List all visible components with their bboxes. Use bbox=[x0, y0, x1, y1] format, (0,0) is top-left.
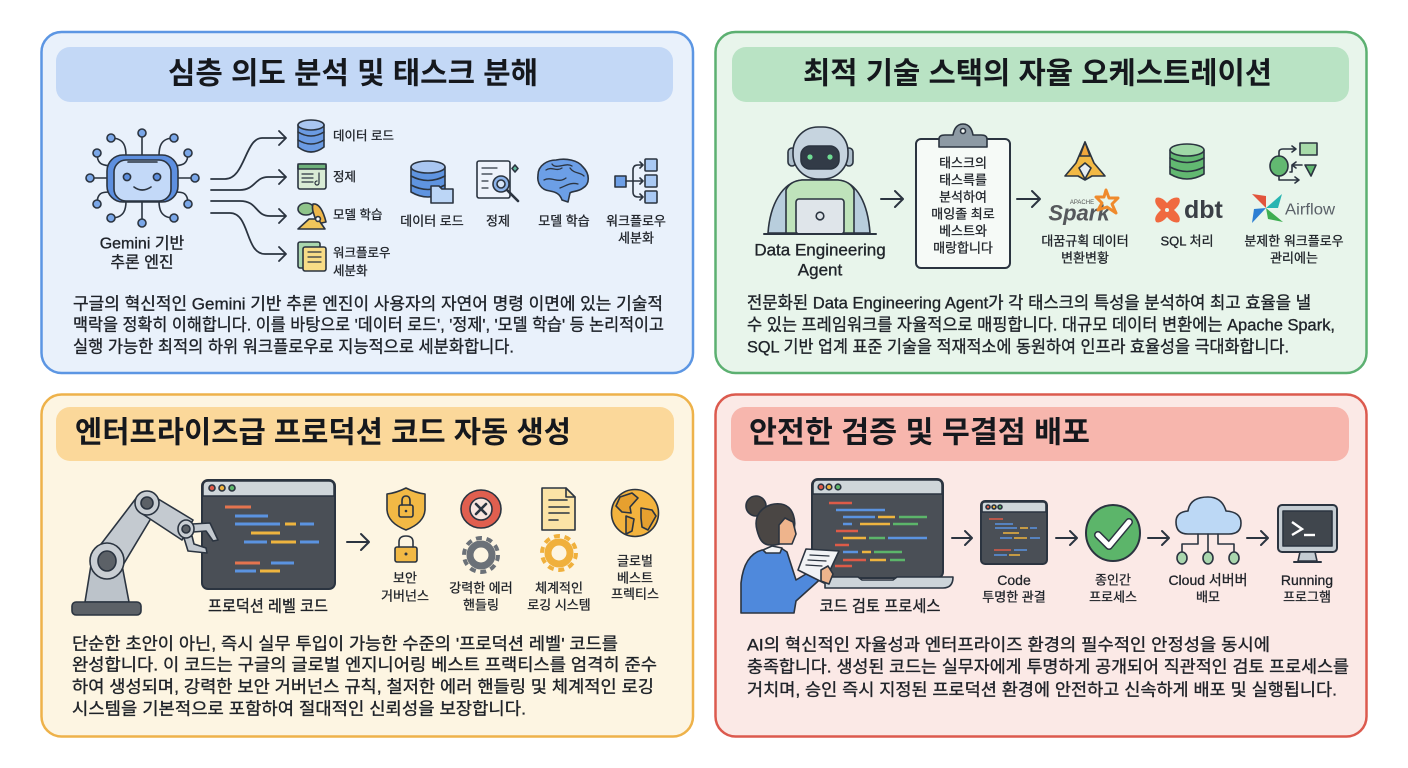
text block: intent analysis body: 구글의 혁신적인 Gemini 기반 추론 엔진이 사용자의 자연어 명령 이면에 있는 기술적 bbox=[73, 294, 663, 314]
label: Gemini engine: Gemini 기반 bbox=[100, 234, 185, 252]
label: cloud server deploy bbox=[1168, 572, 1248, 604]
icon: log document and gear bbox=[542, 488, 576, 570]
arrow: clipboard to tools bbox=[1017, 191, 1040, 207]
icon: clipboard with text: 태스크의 bbox=[939, 156, 987, 170]
text block: production code body bbox=[72, 634, 657, 718]
icon: clipboard with text: 태스륵를 bbox=[939, 172, 987, 188]
label: global best practices bbox=[611, 554, 659, 602]
icon: workflow document bbox=[298, 242, 326, 271]
label: error handling: 강력한 에러 bbox=[449, 580, 513, 596]
icon: database with folder bbox=[411, 161, 453, 203]
logo: Apache Spark: Spark bbox=[1048, 200, 1111, 226]
logo: dbt bbox=[1155, 196, 1224, 224]
icon: clipboard with text: 베스트와 bbox=[939, 224, 987, 238]
label: workflow small bbox=[333, 246, 391, 278]
text block: production code body: 완성합니다. 이 코드는 구글의 글로벌 엔지니어링 베스트 프랙티스를 엄격히 준수 bbox=[72, 656, 657, 674]
label: workflow small: 세분화 bbox=[333, 264, 368, 278]
text block: production code body: 시스템을 기본적으로 포함하여 절대적인 신뢰성을 보장합니다. bbox=[72, 700, 526, 718]
arrow: agent to clipboard bbox=[881, 191, 903, 207]
label: running program: 프로그햄 bbox=[1283, 590, 1331, 604]
icon: engineering agent robot bbox=[764, 127, 876, 234]
logo: Airflow: Airflow bbox=[1285, 202, 1335, 218]
heading: production code: 엔터프라이즈급 프로덕션 코드 자동 생성 bbox=[75, 416, 571, 450]
label: logging system: 체계적인 bbox=[535, 580, 583, 596]
icon: terminal monitor bbox=[1278, 505, 1337, 562]
label: logging system: 로깅 시스템 bbox=[527, 598, 591, 612]
label: large scale transform: 변환변황 bbox=[1061, 250, 1109, 266]
label: cloud server deploy: Cloud 서버버 bbox=[1168, 572, 1248, 588]
icon: cleansing bbox=[298, 164, 326, 189]
text block: orchestration body bbox=[747, 294, 1335, 356]
heading: safe deployment: 안전한 검증 및 무결점 배포 bbox=[749, 416, 1090, 450]
label: SQL processing: SQL 처리 bbox=[1160, 234, 1214, 248]
label: workflow management: 분제한 워크플로우 bbox=[1244, 234, 1344, 248]
label: cleansing: 정제 bbox=[486, 214, 510, 228]
label: error handling: 핸들링 bbox=[463, 598, 499, 612]
label: model training small: 모델 학습 bbox=[333, 208, 382, 222]
text block: intent analysis body bbox=[73, 294, 664, 356]
panel: intent analysis bbox=[42, 32, 693, 373]
text block: orchestration body: SQL 기반 업계 표준 기술을 적재적소에 동원하여 인프라 효율성을 극대화합니다. bbox=[747, 338, 1289, 356]
logo: Apache Spark: APACHE bbox=[1070, 200, 1094, 206]
label: security governance: 거버넌스 bbox=[381, 588, 429, 604]
label: workflow small: 워크플로우 bbox=[333, 246, 391, 260]
panel: production code bbox=[42, 394, 693, 736]
label: Data Engineering Agent: Data Engineering bbox=[754, 240, 886, 260]
icon: error and gear bbox=[461, 490, 501, 572]
logo: Apache Spark bbox=[1048, 190, 1118, 226]
label: error handling bbox=[449, 580, 513, 612]
label: large scale transform: 대꿈규획 데이터 bbox=[1041, 234, 1129, 248]
label: workflow management: 관리에는 bbox=[1270, 250, 1318, 266]
icon: clipboard with text bbox=[916, 124, 1010, 268]
label: large scale transform bbox=[1041, 234, 1129, 266]
label: human in the loop: 종인간 bbox=[1095, 572, 1131, 588]
text block: deployment body: 거치며, 승인 즉시 지정된 프로덕션 환경에 안전하고 신속하게 배포 및 실행됩니다. bbox=[747, 680, 1337, 700]
label: code review process: 코드 검토 프로세스 bbox=[820, 598, 940, 616]
icon: database small bbox=[298, 120, 324, 152]
text block: intent analysis body: 실행 가능한 최적의 하위 워크플로우로 지능적으로 세분화합니다. bbox=[73, 338, 514, 356]
arrows: engine to subtasks bbox=[211, 131, 286, 261]
arrow: laptop to window bbox=[952, 531, 972, 545]
label: workflow split bbox=[606, 214, 666, 246]
text block: production code body: 단순한 초안이 아닌, 즉시 실무 투입이 가능한 수준의 '프로덕션 레벨' 코드를 bbox=[72, 634, 618, 654]
text block: deployment body: AI의 혁신적인 자율성과 엔터프라이즈 환경의 필수적인 안정성을 동시에 bbox=[747, 636, 1270, 654]
label: cleansing small: 정제 bbox=[333, 170, 356, 184]
label: data load: 데이터 로드 bbox=[400, 214, 464, 228]
icon: laptop with code bbox=[812, 479, 953, 588]
label: Gemini engine bbox=[100, 234, 185, 272]
label: human in the loop: 프로세스 bbox=[1089, 590, 1137, 604]
label: running program: Running bbox=[1281, 572, 1333, 588]
icon: workflow diagram bbox=[1270, 143, 1317, 183]
text block: deployment body: 충족합니다. 생성된 코드는 실무자에게 투명하게 공개되어 직관적인 검토 프로세스를 bbox=[747, 658, 1349, 676]
label: cloud server deploy: 배모 bbox=[1196, 590, 1220, 604]
label: Data Engineering Agent: Agent bbox=[798, 260, 842, 280]
icon: document with magnifier bbox=[477, 161, 518, 201]
label: code transparent observation bbox=[982, 572, 1046, 604]
icon: person reviewing code bbox=[741, 496, 839, 613]
panel: safe deployment bbox=[716, 394, 1366, 736]
text block: orchestration body: 전문화된 Data Engineering Agent가 각 태스크의 특성을 분석하여 최고 효율을 낼 bbox=[747, 294, 1311, 312]
icon: robot arm bbox=[72, 491, 218, 615]
icon: clipboard with text: 분석하여 bbox=[939, 190, 987, 204]
panel: stack orchestration bbox=[716, 32, 1366, 373]
label: production level code: 프로덕션 레벨 코드 bbox=[208, 598, 328, 616]
icon: globe bbox=[612, 490, 658, 536]
label: global best practices: 프렉티스 bbox=[611, 586, 659, 602]
heading: stack orchestration: 최적 기술 스택의 자율 오케스트레이션 bbox=[803, 58, 1272, 90]
text block: production code body: 하여 생성되며, 강력한 보안 거버넌스 규칙, 철저한 에러 핸들링 및 체계적인 로깅 bbox=[72, 678, 654, 696]
label: global best practices: 글로벌 bbox=[617, 554, 653, 568]
label: security governance bbox=[381, 570, 429, 604]
icon: clipboard with text: 매잉졸 최로 bbox=[931, 206, 995, 222]
icon: security shield and lock bbox=[387, 488, 425, 562]
arrow: code to qualities bbox=[347, 534, 369, 550]
text block: intent analysis body: 맥락을 정확히 이해합니다. 이를 바탕으로 '데이터 로드', '정제', '모델 학습' 등 논리적이고 bbox=[73, 316, 664, 334]
label: security governance: 보안 bbox=[393, 570, 417, 586]
icon: approval check bbox=[1086, 505, 1140, 561]
label: data load small: 데이터 로드 bbox=[333, 129, 394, 143]
label: workflow split: 워크플로우 bbox=[606, 214, 666, 228]
icon: database green bbox=[1170, 144, 1204, 179]
logo: Airflow bbox=[1252, 194, 1335, 223]
label: Data Engineering Agent bbox=[754, 240, 886, 280]
text block: orchestration body: 수 있는 프레임워크를 자율적으로 매핑합니다. 대규모 데이터 변환에는 Apache Spark, bbox=[747, 316, 1335, 334]
label: code transparent observation: 투명한 관결 bbox=[982, 590, 1046, 604]
icon: brain bbox=[538, 159, 588, 202]
icon: Gemini robot bbox=[86, 129, 199, 227]
arrow: approval to cloud bbox=[1148, 531, 1169, 545]
label: Gemini engine: 추론 엔진 bbox=[110, 254, 174, 272]
icon: cloud server bbox=[1176, 497, 1241, 564]
label: workflow management bbox=[1244, 234, 1344, 266]
label: human in the loop bbox=[1089, 572, 1137, 604]
icon: rocket bbox=[1065, 142, 1105, 180]
label: workflow split: 세분화 bbox=[618, 230, 654, 246]
logo: dbt: dbt bbox=[1184, 196, 1224, 224]
text block: deployment body bbox=[747, 636, 1349, 700]
arrow: cloud to monitor bbox=[1247, 531, 1268, 545]
label: global best practices: 베스트 bbox=[617, 570, 653, 586]
heading: intent analysis: 심층 의도 분석 및 태스크 분해 bbox=[168, 58, 538, 90]
icon: model training bbox=[298, 203, 326, 229]
icon: small code window bbox=[981, 501, 1047, 564]
label: code transparent observation: Code bbox=[997, 572, 1031, 588]
arrow: window to approval bbox=[1056, 531, 1077, 545]
label: logging system bbox=[527, 580, 591, 612]
icon: code window bbox=[202, 480, 335, 589]
icon: workflow tree bbox=[615, 159, 657, 203]
label: model training: 모델 학습 bbox=[538, 214, 590, 228]
label: running program bbox=[1281, 572, 1333, 604]
icon: clipboard with text: 매랑합니다 bbox=[933, 240, 993, 256]
